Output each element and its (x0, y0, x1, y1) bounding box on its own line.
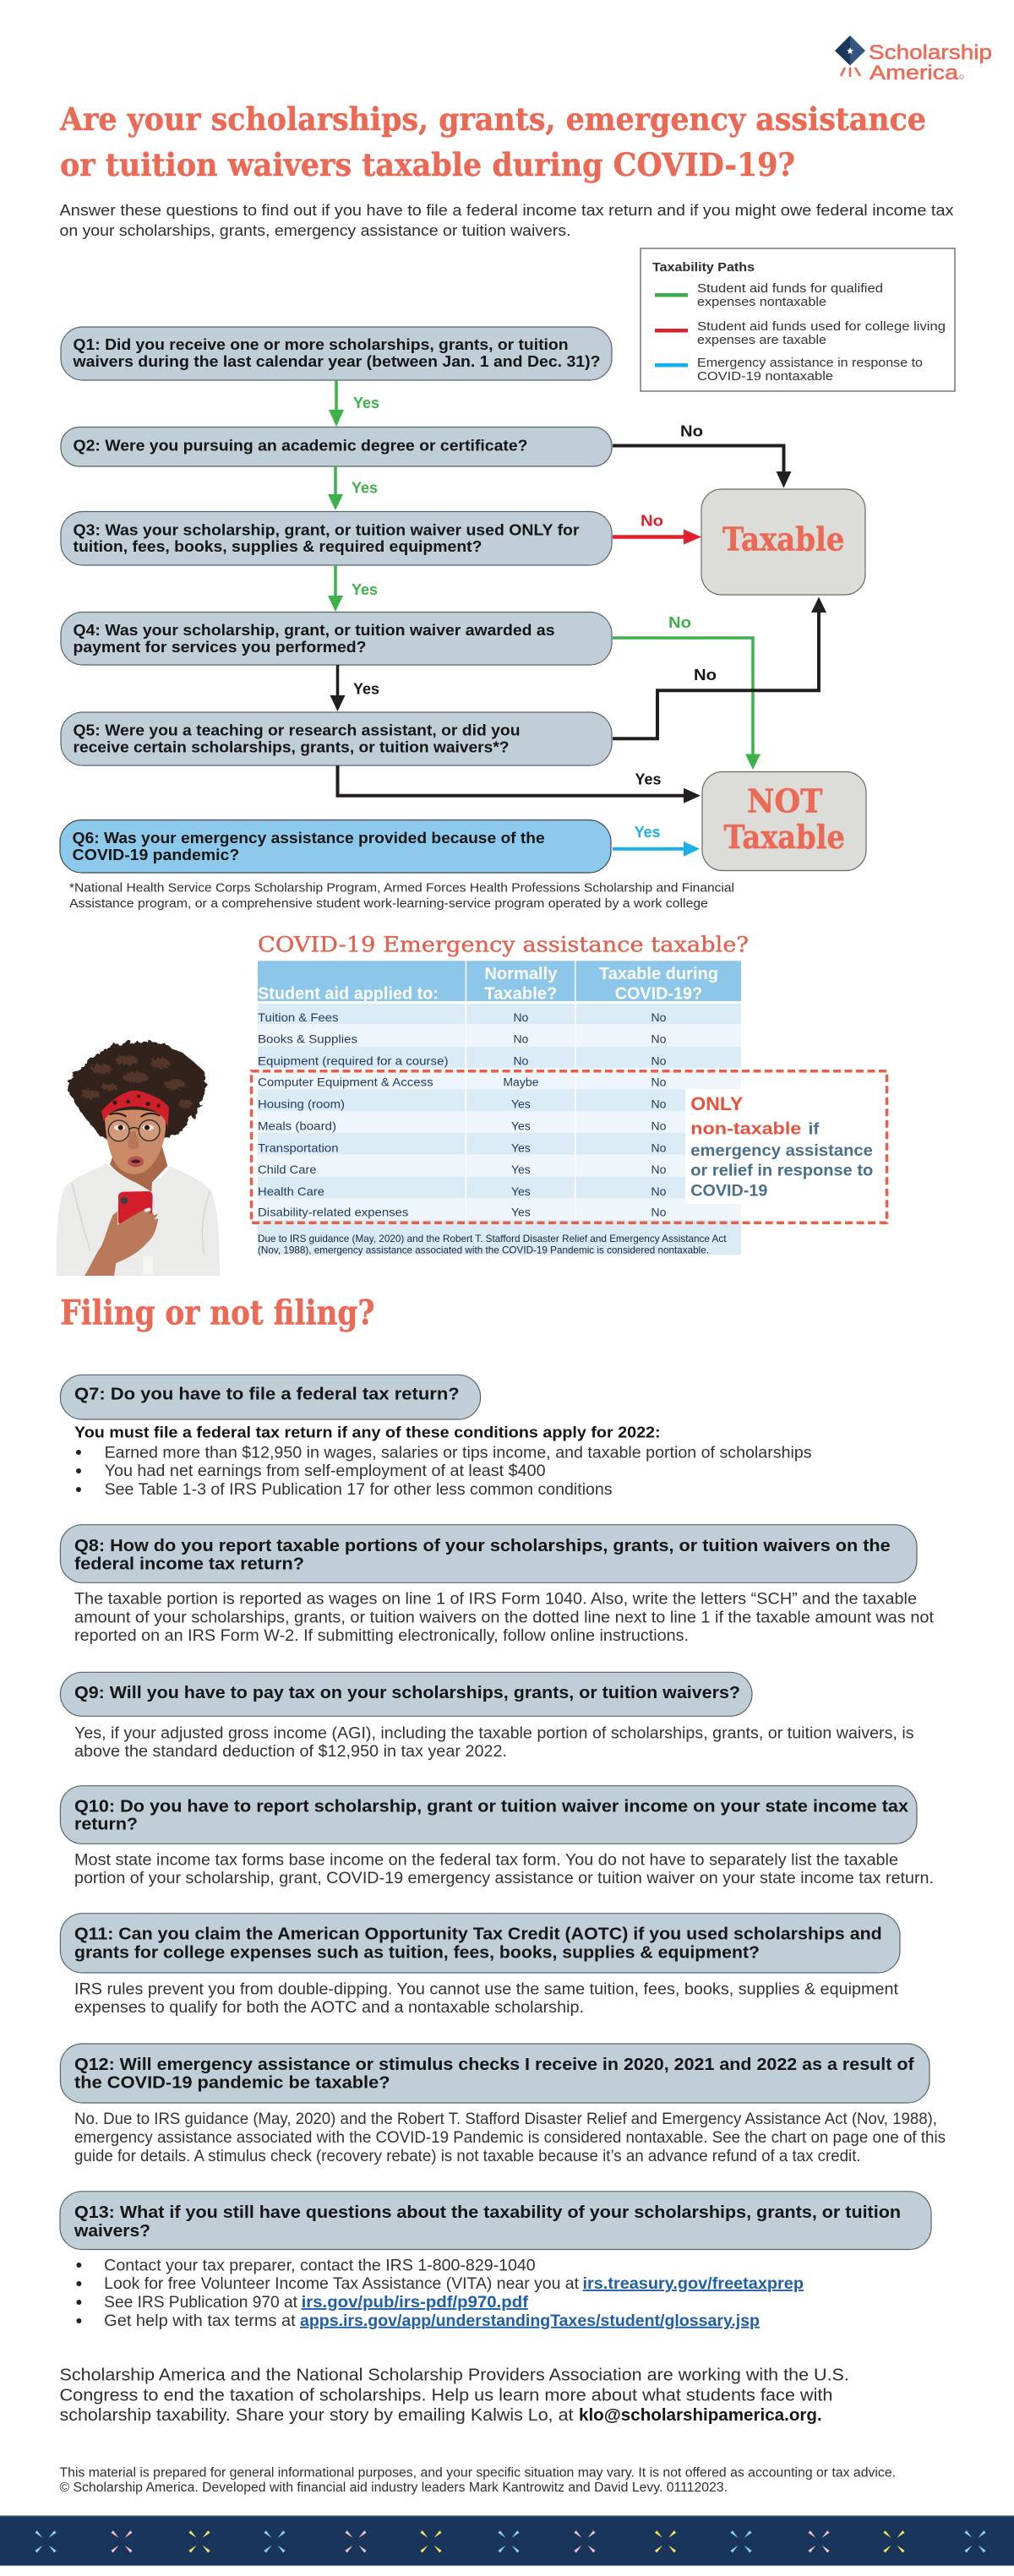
answer Q8: The taxable portion is reported as wages on line 1 of IRS Form 1040. Also, write the letters “SCH” and the taxable (74, 1591, 917, 1609)
answer Q7: See Table 1-3 of IRS Publication 17 for other less common conditions (105, 1481, 613, 1499)
Q10 block (60, 1786, 934, 1887)
answer Q11 (74, 1980, 899, 2017)
question box Q4: payment for services you performed? (73, 639, 367, 656)
row: Child Care: Yes (511, 1163, 531, 1176)
question box Q1: Q1: Did you receive one or more scholarships, grants, or tuition (73, 336, 568, 353)
table note: (Nov, 1988), emergency assistance associated with the COVID-19 Pandemic is considered nontaxable. (258, 1244, 709, 1255)
title: or tuition waivers taxable during COVID-19? (60, 146, 795, 183)
answer Q12 (74, 2110, 946, 2165)
table: student aid applied to (258, 961, 741, 1255)
legend: taxability paths: expenses are taxable (697, 334, 826, 347)
logo: Scholarship America: America (870, 62, 959, 84)
table note (258, 1233, 727, 1255)
callout: only non-taxable if emergency assistance: COVID-19 (690, 1183, 767, 1201)
row: Housing (room): Yes (511, 1097, 531, 1111)
question box Q5: Q5: Were you a teaching or research assistant, or did you (73, 722, 521, 739)
question box Q11: Q11: Can you claim the American Opportunity Tax Credit (AOTC) if you used scholarships and (74, 1925, 882, 1944)
footnote: Assistance program, or a comprehensive student work-learning-service program operated by a work college (69, 897, 708, 911)
result box Taxable (701, 489, 865, 595)
legend: taxability paths (641, 248, 955, 391)
answer Q10: portion of your scholarship, grant, COVID-19 emergency assistance or tuition waiver on your state income tax return. (74, 1870, 934, 1887)
row: Health Care: No (651, 1185, 667, 1198)
Q8 block (60, 1525, 935, 1645)
table header: Normally (484, 965, 558, 983)
question box Q8: federal income tax return? (74, 1555, 304, 1574)
heading: COVID-19 Emergency assistance taxable?: COVID-19 Emergency assistance taxable? (258, 933, 749, 958)
Q12 block (60, 2044, 946, 2165)
result box Not Taxable: NOT (747, 782, 823, 820)
row: Child Care: Child Care (258, 1163, 317, 1176)
legend: taxability paths: Emergency assistance in response to (697, 357, 923, 370)
question box Q11 (60, 1914, 900, 1973)
question box Q12 (60, 2044, 930, 2103)
answer Q12: guide for details. A stimulus check (recovery rebate) is not taxable because it’s an advance refund of a tax credit. (74, 2148, 861, 2165)
closing statement: Scholarship America and the National Scholarship Providers Association are working with the U.S. (59, 2366, 849, 2385)
question box Q3 (61, 512, 612, 565)
question box Q9: Q9: Will you have to pay tax on your scholarships, grants, or tuition waivers? (74, 1683, 740, 1702)
answer Q8: reported on an IRS Form W-2. If submitting electronically, follow online instructions. (74, 1627, 689, 1645)
Q11 block (60, 1914, 900, 2017)
arrow Q6 yes (613, 823, 700, 857)
answer Q10 (74, 1851, 934, 1887)
question box Q3: tuition, fees, books, supplies & required equipment? (73, 538, 482, 555)
result box Not Taxable (702, 772, 866, 870)
arrow Q6 yes: Yes (635, 823, 661, 841)
question box Q13: waivers? (74, 2221, 150, 2241)
row: Computer Equipment & Access: No (651, 1076, 667, 1089)
row: Meals (board): No (651, 1119, 667, 1132)
arrow Q2 no (613, 422, 791, 488)
question box Q3: Q3: Was your scholarship, grant, or tuition waiver used ONLY for (73, 522, 580, 539)
footnote (69, 882, 734, 911)
arrow Q2 yes (328, 466, 378, 510)
question box Q6: COVID-19 pandemic? (73, 847, 239, 863)
question box Q6: Q6: Was your emergency assistance provided because of the (73, 830, 545, 847)
answer Q8: amount of your scholarships, grants, or tuition waivers on the dotted line next to line 1 if the taxable amount was not (74, 1609, 935, 1626)
row: Books & Supplies: No (513, 1032, 529, 1046)
answer Q9 (74, 1724, 914, 1761)
row: Books & Supplies: Books & Supplies (258, 1032, 357, 1046)
Q7 block (60, 1375, 812, 1499)
row: Equipment: No (651, 1054, 667, 1067)
row: Child Care: No (651, 1163, 667, 1176)
question box Q11: grants for college expenses such as tuition, fees, books, supplies & equipment? (74, 1942, 760, 1962)
arrow Q5 no (613, 596, 826, 738)
question box Q2 (61, 428, 612, 466)
question box Q5: receive certain scholarships, grants, or tuition waivers*? (73, 738, 509, 755)
question box Q13: Q13: What if you still have questions about the taxability of your scholarships, grants, or tuition (74, 2203, 901, 2222)
answer Q12: emergency assistance associated with the COVID-19 Pandemic is considered nontaxable. See the chart on page one of this (74, 2129, 946, 2147)
row: Tuition & Fees (258, 1010, 667, 1024)
row: Computer Equipment & Access (258, 1076, 667, 1089)
row: Equipment: Equipment (required for a course) (258, 1054, 448, 1067)
answer Q7: You must file a federal tax return if any of these conditions apply for 2022: (74, 1423, 661, 1440)
legend: taxability paths: Student aid funds used for college living (697, 320, 946, 334)
row: Disability-related expenses: Yes (511, 1205, 531, 1218)
result box Not Taxable: Taxable (723, 818, 845, 856)
row: Meals (board) (258, 1119, 667, 1132)
answer Q9: above the standard deduction of $12,950 in tax year 2022. (74, 1743, 507, 1761)
Q13 block (60, 2192, 931, 2330)
row: Tuition & Fees: No (513, 1010, 529, 1024)
callout: only non-taxable if emergency assistance: ONLY (690, 1093, 744, 1114)
row: Health Care (258, 1185, 667, 1198)
question box Q13 (60, 2192, 931, 2249)
footer band with starburst pattern (0, 2515, 1014, 2566)
row: Health Care: Health Care (258, 1185, 324, 1198)
row: Transportation (258, 1141, 667, 1154)
intro text: on your scholarships, grants, emergency assistance or tuition waivers. (59, 221, 571, 239)
disclaimer (59, 2466, 896, 2495)
answer Q10: Most state income tax forms base income on the federal tax form. You do not have to separately list the taxable (74, 1851, 898, 1869)
row: Child Care (258, 1163, 667, 1176)
answer Q9: Yes, if your adjusted gross income (AGI), including the taxable portion of scholarships, grants, or tuition waivers, is (74, 1724, 914, 1742)
arrow Q4 no (613, 613, 760, 770)
title (59, 101, 926, 183)
row: Equipment: No (513, 1054, 529, 1067)
arrow Q2 yes: Yes (352, 478, 378, 497)
row: Books & Supplies: No (651, 1032, 667, 1046)
question box Q7: Q7: Do you have to file a federal tax return? (74, 1385, 460, 1404)
logo: Scholarship America (835, 35, 992, 84)
question box Q7 (60, 1375, 481, 1419)
row: Disability-related expenses (258, 1205, 667, 1218)
question box Q12: Q12: Will emergency assistance or stimulus checks I receive in 2020, 2021 and 2022 as a result of (74, 2055, 914, 2074)
disclaimer: © Scholarship America. Developed with financial aid industry leaders Mark Kantrowitz and David Levy. 01112023. (59, 2481, 728, 2495)
table header: COVID-19? (615, 984, 702, 1003)
callout: only non-taxable if emergency assistance: emergency assistance (690, 1142, 873, 1160)
closing statement: klo@scholarshipamerica.org. (579, 2405, 822, 2425)
arrow Q4 yes: Yes (353, 679, 379, 698)
flowchart (60, 327, 866, 873)
answer Q11: expenses to qualify for both the AOTC and a nontaxable scholarship. (74, 1999, 584, 2017)
illustration: surprised woman looking at red phone (57, 1041, 220, 1276)
callout: only non-taxable if emergency assistance: if (809, 1120, 820, 1138)
question box Q8: Q8: How do you report taxable portions of your scholarships, grants, or tuition waivers on the (74, 1536, 891, 1555)
row: Equipment (258, 1054, 667, 1067)
answer Q13 with links: irs.gov/pub/irs-pdf/p970.pdf (302, 2294, 529, 2312)
callout: only non-taxable if emergency assistance (252, 1071, 887, 1223)
heading: Filing or not filing?: Filing or not filing? (60, 1293, 374, 1333)
legend: taxability paths: Taxability Paths (652, 261, 755, 275)
question box Q6 (60, 820, 611, 873)
answer Q8 (74, 1591, 935, 1645)
row: Meals (board): Meals (board) (258, 1119, 336, 1132)
row: Meals (board): Yes (511, 1119, 531, 1132)
arrow Q1 yes (329, 380, 379, 427)
question box Q1: waivers during the last calendar year (between Jan. 1 and Dec. 31)? (72, 353, 601, 370)
row: Health Care: Yes (511, 1185, 531, 1198)
table header (258, 961, 741, 1003)
question box Q1 (61, 327, 612, 380)
answer Q7: Earned more than $12,950 in wages, salaries or tips income, and taxable portion of scholarships (105, 1444, 812, 1462)
question box Q2: Q2: Were you pursuing an academic degree or certificate? (73, 438, 527, 455)
answer Q13 with links: irs.treasury.gov/freetaxprep (583, 2275, 804, 2293)
answer Q13 with links: See IRS Publication 970 at (104, 2294, 298, 2312)
row: Disability-related expenses: Disability-related expenses (258, 1205, 408, 1218)
answer Q7: You had net earnings from self-employment of at least $400 (105, 1462, 546, 1480)
closing statement: Congress to end the taxation of scholarships. Help us learn more about what students face with (59, 2385, 832, 2404)
question box Q10 (60, 1786, 917, 1844)
row: Transportation: Yes (511, 1141, 531, 1154)
row: Housing (room) (258, 1097, 667, 1111)
arrow Q2 no: No (680, 422, 703, 439)
row: Computer Equipment & Access: Computer Equipment & Access (258, 1076, 433, 1089)
answer Q13 with links: Contact your tax preparer, contact the IRS 1-800-829-1040 (104, 2257, 536, 2274)
arrow Q5 yes (338, 765, 701, 803)
legend: taxability paths: expenses nontaxable (697, 296, 826, 309)
row: Tuition & Fees: No (651, 1010, 667, 1024)
table header: Taxable? (484, 984, 557, 1003)
answer Q11: IRS rules prevent you from double-dipping. You cannot use the same tuition, fees, books, supplies & equipment (74, 1980, 899, 1998)
arrow Q3 yes: Yes (352, 580, 378, 598)
row: Transportation: No (651, 1141, 667, 1154)
callout: only non-taxable if emergency assistance: or relief in response to (690, 1163, 873, 1180)
row: Disability-related expenses: No (651, 1205, 667, 1218)
closing statement: scholarship taxability. Share your story by emailing Kalwis Lo, at (59, 2405, 574, 2425)
title: Are your scholarships, grants, emergency assistance (59, 101, 926, 138)
table header: Taxable during (599, 965, 718, 983)
row: Transportation: Transportation (258, 1141, 338, 1154)
arrow Q3 yes (328, 565, 378, 612)
arrow Q1 yes: Yes (353, 394, 379, 411)
intro text (59, 201, 954, 239)
question box Q8 (60, 1525, 917, 1582)
question box Q9 (60, 1672, 752, 1716)
row: Housing (room): No (651, 1097, 667, 1111)
row: Tuition & Fees: Tuition & Fees (258, 1010, 338, 1024)
legend: taxability paths: COVID-19 nontaxable (697, 370, 833, 384)
row: Books & Supplies (258, 1032, 667, 1046)
logo: Scholarship America: Scholarship (869, 41, 992, 64)
footnote: *National Health Service Corps Scholarship Program, Armed Forces Health Professions Scholarship and Financial (69, 882, 734, 896)
answer Q13 with links: apps.irs.gov/app/understandingTaxes/student/glossary.jsp (300, 2312, 760, 2330)
disclaimer: This material is prepared for general informational purposes, and your specific situation may vary. It is not offered as accounting or tax advice. (59, 2466, 896, 2481)
intro text: Answer these questions to find out if you have to file a federal income tax return and if you might owe federal income tax (59, 201, 954, 219)
table header: Student aid applied to: (258, 984, 439, 1003)
Q9 block (60, 1672, 914, 1761)
row: Computer Equipment & Access: Maybe (503, 1076, 539, 1089)
arrow Q4 yes (330, 665, 379, 711)
arrow Q5 yes: Yes (635, 771, 661, 787)
question box Q4 (61, 612, 612, 665)
arrow Q4 no: No (668, 613, 691, 631)
question box Q12: the COVID-19 pandemic be taxable? (74, 2072, 390, 2092)
answer Q7 (74, 1423, 812, 1499)
closing statement (59, 2366, 849, 2425)
answer Q13 with links: Get help with tax terms at (104, 2312, 296, 2330)
answer Q13 with links: Look for free Volunteer Income Tax Assistance (VITA) near you at (104, 2275, 580, 2293)
arrow Q3 no (613, 512, 701, 544)
arrow Q5 no: No (694, 666, 717, 683)
result box Taxable: Taxable (722, 520, 845, 558)
table note: Due to IRS guidance (May, 2020) and the Robert T. Stafford Disaster Relief and Emergency Assistance Act (258, 1233, 727, 1244)
question box Q10: Q10: Do you have to report scholarship, grant or tuition waiver income on your state income tax (74, 1797, 909, 1816)
question box Q5 (61, 712, 612, 765)
question box Q4: Q4: Was your scholarship, grant, or tuition waiver awarded as (73, 622, 554, 639)
row: Housing (room): Housing (room) (258, 1097, 345, 1111)
legend: taxability paths: Student aid funds for qualified (697, 282, 883, 296)
answer Q12: No. Due to IRS guidance (May, 2020) and the Robert T. Stafford Disaster Relief and Emergency Assistance Act (Nov, 1988), (74, 2110, 937, 2128)
answer Q13 with links (76, 2257, 804, 2330)
callout: only non-taxable if emergency assistance: non-taxable (690, 1119, 801, 1138)
arrow Q3 no: No (641, 512, 663, 529)
question box Q10: return? (74, 1815, 138, 1834)
